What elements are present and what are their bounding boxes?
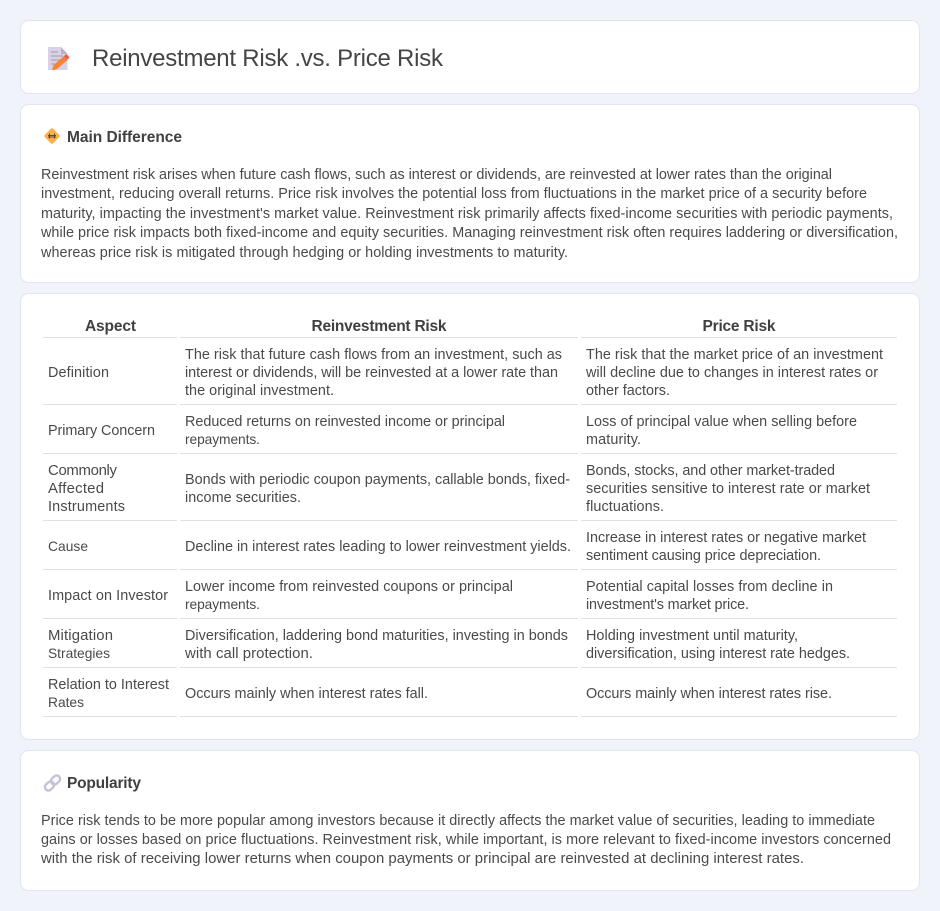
table row: cause: Cause (48, 539, 88, 554)
text block: popularity paragraph (40, 813, 891, 867)
table header row: Reinvestment Risk (312, 318, 447, 335)
table row: relation to interest rates (48, 677, 832, 710)
table row: cause: Increase in interest rates or negative market (586, 530, 866, 546)
table row: definition: Definition (48, 365, 109, 381)
table row: commonly affected instruments: Instruments (48, 499, 125, 515)
table row: commonly affected instruments: Bonds, stocks, and other market-traded (586, 463, 835, 479)
table header row: Aspect (85, 318, 136, 335)
table row: primary concern: maturity. (586, 432, 641, 448)
heading: popularity: Popularity (67, 775, 141, 792)
table row: cause (48, 530, 866, 564)
table row: definition: other factors. (586, 383, 670, 399)
table row: mitigation strategies (48, 628, 850, 662)
table row: relation to interest rates: Occurs mainly when interest rates fall. (185, 686, 428, 702)
table row: primary concern (48, 414, 857, 448)
table row: definition: The risk that the market price of an investment (586, 347, 883, 363)
table row: mitigation strategies: with call protection. (184, 646, 313, 662)
text block: popularity paragraph: Price risk tends to be more popular among investors because it directly affects the market value of securities, leading to immediate (41, 813, 875, 829)
table row: definition: the original investment. (185, 383, 334, 399)
table row: primary concern: repayments. (185, 432, 260, 447)
table row: cause: sentiment causing price depreciation. (586, 548, 821, 564)
icon: warning diamond (44, 128, 60, 144)
table row: commonly affected instruments: securities sensitive to interest rate or market (586, 481, 870, 497)
panel: popularity (20, 750, 920, 890)
text block: popularity paragraph: gains or losses based on price fluctuations. Reinvestment risk, while important, is more relevant to fixed-income investors concerned (41, 832, 891, 848)
panel: comparison table (20, 294, 920, 740)
table row: commonly affected instruments: Bonds with periodic coupon payments, callable bonds, fixed- (185, 472, 570, 488)
table row: relation to interest rates: Occurs mainly when interest rates rise. (586, 686, 832, 702)
title: Reinvestment Risk .vs. Price Risk (92, 45, 444, 72)
table row: impact on investor: repayments. (185, 597, 260, 612)
table row: mitigation strategies: Strategies (48, 646, 110, 661)
table row: commonly affected instruments: Affected (48, 481, 104, 497)
table row: definition: interest or dividends, will be reinvested at a lower rate than (185, 365, 558, 381)
table row: commonly affected instruments (48, 463, 870, 515)
table row: impact on investor: investment's market price. (586, 597, 749, 613)
table row: mitigation strategies: Mitigation (48, 628, 113, 644)
table row: primary concern: Reduced returns on reinvested income or principal (185, 414, 505, 430)
table row: primary concern: Primary Concern (48, 423, 155, 439)
text block: main difference paragraph: while price risk impacts both fixed-income and equity securities. Managing reinvestment risk often requires laddering or diversification, (40, 225, 898, 241)
table row: cause: Decline in interest rates leading to lower reinvestment yields. (185, 539, 571, 555)
table row: definition (48, 347, 883, 399)
table header row (85, 318, 776, 335)
table row: impact on investor: Impact on Investor (48, 588, 168, 604)
table row: mitigation strategies: Diversification, laddering bond maturities, investing in bonds (185, 628, 568, 644)
table row: impact on investor: Lower income from reinvested coupons or principal (185, 579, 513, 595)
text block: main difference paragraph: investment, reducing overall returns. Price risk involves the potential loss from fluctuations in the market price of a security before (41, 186, 867, 202)
heading: main difference: Main Difference (67, 129, 182, 146)
panel: main difference (20, 104, 920, 282)
table row: definition: The risk that future cash flows from an investment, such as (185, 347, 562, 363)
text block: main difference paragraph: Reinvestment risk arises when future cash flows, such as interest or dividends, are reinvested at lower rates than the original (41, 167, 832, 183)
table header row: Price Risk (702, 318, 776, 335)
table row: impact on investor (48, 579, 833, 613)
text block: main difference paragraph: whereas price risk is mitigated through hedging or holding investments to maturity. (40, 245, 568, 261)
table row: primary concern: Loss of principal value when selling before (586, 414, 857, 430)
table row: mitigation strategies: diversification, using interest rate hedges. (586, 646, 850, 662)
icon: chain link (43, 774, 62, 792)
icon: memo with pencil (48, 47, 70, 70)
table row: impact on investor: Potential capital losses from decline in (586, 579, 833, 595)
table row: mitigation strategies: Holding investment until maturity, (586, 628, 798, 644)
text block: main difference paragraph: maturity, impacting the investment's market value. Reinvestment risk primarily affects fixed-income securities with periodic payments, (41, 206, 893, 222)
table row: relation to interest rates: Rates (48, 695, 84, 710)
table row: relation to interest rates: Relation to Interest (48, 677, 169, 693)
text block: main difference paragraph (40, 167, 898, 261)
table row: commonly affected instruments: Commonly (48, 463, 118, 479)
table row: definition: will decline due to changes in interest rates or (585, 365, 878, 381)
table row: commonly affected instruments: income securities. (185, 490, 301, 506)
text block: popularity paragraph: with the risk of receiving lower returns when coupon payments or principal are reinvested at declining interest rates. (40, 851, 804, 867)
panel: page header (20, 20, 920, 94)
table row: commonly affected instruments: fluctuations. (586, 499, 664, 515)
